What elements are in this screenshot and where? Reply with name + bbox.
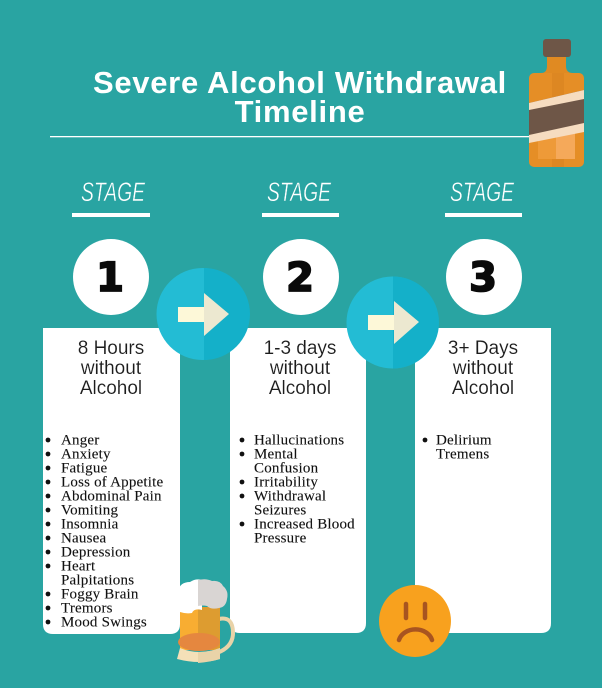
number circle 1 (73, 239, 149, 315)
stage 2 symptoms list: Confusion (254, 460, 319, 476)
stage 3 symptoms list (423, 432, 492, 462)
number circle 1: 1 (96, 255, 124, 301)
stage 1 symptoms list: Anxiety (61, 446, 111, 462)
stage 2 heading: without (269, 358, 331, 379)
stage 3 heading: without (452, 358, 514, 379)
stage 2 symptoms list: Seizures (254, 502, 306, 518)
stage 2 symptoms list: Hallucinations (254, 432, 344, 448)
stage 1 symptoms list: Vomiting (61, 502, 118, 518)
stage 3 heading: Alcohol (452, 378, 514, 399)
stage 2 symptoms list: Pressure (254, 530, 307, 546)
stage 1 heading: Alcohol (80, 378, 142, 399)
panel: stage 1 (43, 328, 180, 634)
stage 3 label (445, 177, 522, 217)
stage 1 symptoms list: Nausea (61, 530, 106, 546)
number circle 3: 3 (469, 255, 497, 301)
stage 3 heading: 3+ Days (448, 338, 518, 359)
stage 1 heading (78, 338, 144, 399)
stage 1 symptoms list: Insomnia (61, 516, 119, 532)
arrow 1 (156, 268, 250, 360)
icon: sad face (379, 585, 451, 657)
panel: stage 3 (415, 328, 551, 633)
stage 1 heading: 8 Hours (78, 338, 144, 359)
stage 1 symptoms list: Abdominal Pain (61, 488, 162, 504)
stage 2 heading: 1-3 days (264, 338, 336, 359)
stage 1 symptoms list: Tremors (61, 600, 113, 616)
title (93, 65, 507, 129)
stage 1 label (72, 177, 150, 217)
number circle 2: 2 (286, 255, 314, 301)
stage 3 label: STAGE (450, 177, 515, 207)
stage 2 symptoms list (240, 432, 355, 546)
panel: stage 2 (230, 328, 366, 633)
stage 1 symptoms list: Foggy Brain (61, 586, 139, 602)
stage 1 symptoms list: Anger (61, 432, 100, 448)
arrow 2 (346, 276, 439, 369)
icon: beer mug (176, 579, 233, 663)
stage 3 heading (448, 338, 518, 399)
stage 1 symptoms list: Fatigue (61, 460, 108, 476)
stage 1 heading: without (80, 358, 142, 379)
stage 2 label (262, 177, 339, 217)
stage 1 symptoms list: Mood Swings (61, 614, 147, 630)
stage 3 symptoms list: Delirium (436, 432, 492, 448)
stage 2 symptoms list: Irritability (254, 474, 318, 490)
stage 1 symptoms list: Loss of Appetite (61, 474, 163, 490)
number circle 3 (446, 239, 522, 315)
stage 2 symptoms list: Increased Blood (254, 516, 355, 532)
stage 1 symptoms list: Heart (61, 558, 96, 574)
stage 1 symptoms list: Palpitations (61, 572, 134, 588)
stage 2 label: STAGE (267, 177, 332, 207)
stage 1 symptoms list: Depression (61, 544, 131, 560)
title: Severe Alcohol Withdrawal (93, 65, 507, 100)
stage 2 heading: Alcohol (269, 378, 331, 399)
stage 1 symptoms list (46, 432, 163, 630)
number circle 2 (263, 239, 339, 315)
icon: whisky bottle (529, 39, 584, 167)
stage 1 label: STAGE (81, 177, 146, 207)
stage 2 symptoms list: Withdrawal (254, 488, 326, 504)
stage 2 heading (264, 338, 336, 399)
title: Timeline (235, 94, 365, 129)
stage 3 symptoms list: Tremens (436, 446, 489, 462)
stage 2 symptoms list: Mental (254, 446, 298, 462)
